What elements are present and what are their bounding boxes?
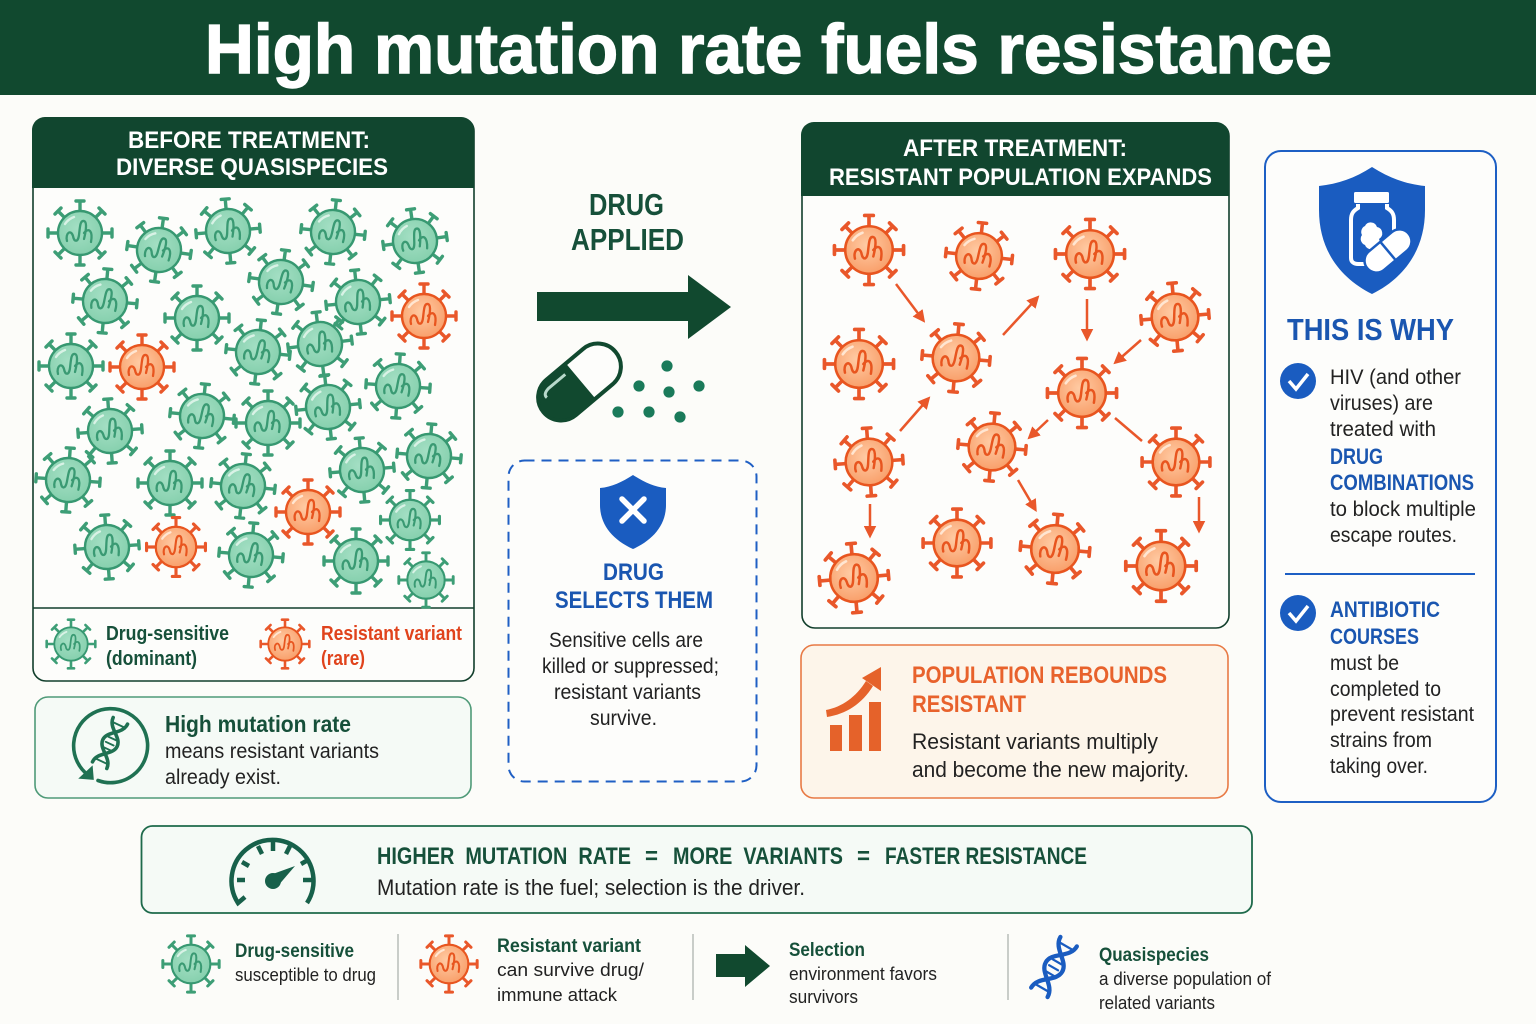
text: drug combinations: treated with bbox=[1330, 418, 1436, 441]
text: drug combinations: HIV (and other bbox=[1330, 366, 1461, 389]
key: resistant variant: can survive drug/ bbox=[497, 960, 644, 980]
icon: speedometer bbox=[232, 840, 314, 903]
key: selection: environment favors bbox=[789, 964, 937, 984]
icon: check mark bbox=[1280, 595, 1316, 631]
panel: drug selects them bbox=[508, 460, 756, 782]
callout: population rebounds resistant bbox=[801, 645, 1228, 798]
heading: population rebounds bbox=[912, 662, 1167, 718]
text: drug combinations bbox=[1330, 366, 1476, 547]
key: drug-sensitive: susceptible to drug bbox=[235, 965, 376, 985]
text: population explanation: Resistant variants multiply bbox=[912, 729, 1158, 754]
icon: shield with medicine bottle bbox=[1319, 167, 1425, 294]
text: antibiotic courses: prevent resistant bbox=[1330, 703, 1474, 726]
heading: drug applied: APPLIED bbox=[571, 222, 684, 257]
arrow: drug applied bbox=[537, 275, 731, 339]
key: selection bbox=[716, 940, 937, 1007]
heading: after treatment bbox=[829, 135, 1212, 191]
arrows: spread of resistant variants bbox=[870, 284, 1199, 535]
heading: after treatment: RESISTANT POPULATION EXPANDS bbox=[829, 164, 1212, 191]
panel: after treatment bbox=[801, 122, 1229, 628]
banner: higher mutation rate bbox=[142, 826, 1252, 913]
key: quasispecies: a diverse population of bbox=[1099, 969, 1272, 989]
heading: this is why: THIS IS WHY bbox=[1287, 312, 1454, 347]
text: antibiotic courses: ANTIBIOTIC bbox=[1330, 597, 1440, 622]
legend: resistant variant: Resistant variant bbox=[321, 623, 462, 645]
text: selection explanation bbox=[542, 629, 719, 730]
virus population: mostly drug-sensitive bbox=[34, 196, 464, 607]
heading: drug selects them bbox=[555, 559, 713, 614]
key: resistant variant bbox=[421, 936, 644, 1005]
text: antibiotic courses bbox=[1330, 597, 1474, 778]
icon: shield with x bbox=[600, 475, 666, 549]
icon: capsule and granules bbox=[529, 334, 705, 430]
text: drug combinations: viruses) are bbox=[1330, 392, 1433, 415]
key: quasispecies: Quasispecies bbox=[1099, 945, 1209, 966]
text: equation: MORE VARIANTS bbox=[673, 843, 843, 870]
text: antibiotic courses: completed to bbox=[1330, 678, 1441, 701]
text: selection explanation: resistant variants bbox=[554, 681, 701, 704]
text: high mutation rate: already exist. bbox=[165, 766, 281, 789]
text: population explanation: and become the new majority. bbox=[912, 757, 1189, 782]
text: selection explanation: Sensitive cells are bbox=[549, 629, 703, 652]
heading: drug selects them: SELECTS THEM bbox=[555, 587, 713, 614]
panel: before treatment bbox=[32, 117, 474, 681]
legend: resistant variant: (rare) bbox=[321, 648, 365, 670]
text: selection explanation: survive. bbox=[590, 707, 657, 730]
text: equation: FASTER RESISTANCE bbox=[885, 843, 1087, 870]
key: drug-sensitive: Drug-sensitive bbox=[235, 941, 354, 962]
text: population explanation bbox=[912, 729, 1189, 782]
text: antibiotic courses: COURSES bbox=[1330, 624, 1419, 649]
key: resistant variant: immune attack bbox=[497, 985, 618, 1005]
text: antibiotic courses: strains from bbox=[1330, 729, 1432, 752]
heading: before treatment bbox=[116, 127, 388, 181]
heading: population rebounds: RESISTANT bbox=[912, 691, 1026, 718]
key: drug-sensitive bbox=[163, 936, 376, 992]
title banner bbox=[0, 0, 1536, 95]
text: antibiotic courses: must be bbox=[1330, 652, 1399, 675]
text: antibiotic courses: taking over. bbox=[1330, 755, 1428, 778]
icon: check mark bbox=[1280, 363, 1316, 399]
text: high mutation rate: High mutation rate bbox=[165, 711, 351, 737]
heading: population rebounds: POPULATION REBOUNDS bbox=[912, 662, 1167, 689]
callout: high mutation rate bbox=[35, 697, 471, 798]
icon: rising bar chart bbox=[826, 667, 881, 751]
text: equation: = bbox=[857, 843, 870, 870]
text: equation: HIGHER MUTATION RATE bbox=[377, 843, 631, 870]
heading: after treatment: AFTER TREATMENT: bbox=[903, 135, 1127, 162]
title banner: High mutation rate fuels resistance bbox=[205, 10, 1332, 88]
icon: dna in circular arrow bbox=[74, 709, 148, 783]
legend: drug-sensitive: Drug-sensitive bbox=[106, 623, 229, 645]
heading: before treatment: DIVERSE QUASISPECIES bbox=[116, 154, 388, 181]
key: selection: Selection bbox=[789, 940, 865, 961]
heading: before treatment: BEFORE TREATMENT: bbox=[128, 127, 370, 154]
key: quasispecies: related variants bbox=[1099, 993, 1215, 1013]
text: drug combinations: escape routes. bbox=[1330, 524, 1457, 547]
text: high mutation rate: means resistant variants bbox=[165, 740, 379, 763]
text: fuel and driver: Mutation rate is the fuel; selection is the driver. bbox=[377, 875, 805, 900]
legend: drug-sensitive bbox=[47, 620, 229, 670]
heading: drug selects them: DRUG bbox=[603, 559, 664, 586]
panel: this is why bbox=[1265, 151, 1496, 802]
text: drug combinations: to block multiple bbox=[1330, 498, 1476, 521]
text: equation bbox=[377, 843, 1087, 870]
text: drug combinations: DRUG bbox=[1330, 444, 1383, 469]
text: drug combinations: COMBINATIONS bbox=[1330, 470, 1474, 495]
text: equation: = bbox=[645, 843, 658, 870]
virus population: resistant bbox=[817, 215, 1212, 615]
key: selection: survivors bbox=[789, 987, 858, 1007]
legend: resistant variant bbox=[261, 620, 462, 670]
key: quasispecies bbox=[1031, 937, 1272, 1013]
legend: drug-sensitive: (dominant) bbox=[106, 648, 197, 670]
key: resistant variant: Resistant variant bbox=[497, 936, 642, 957]
text: selection explanation: killed or suppressed; bbox=[542, 655, 719, 678]
text: high mutation rate bbox=[165, 711, 379, 789]
heading: drug applied bbox=[571, 187, 684, 257]
heading: drug applied: DRUG bbox=[589, 187, 664, 222]
